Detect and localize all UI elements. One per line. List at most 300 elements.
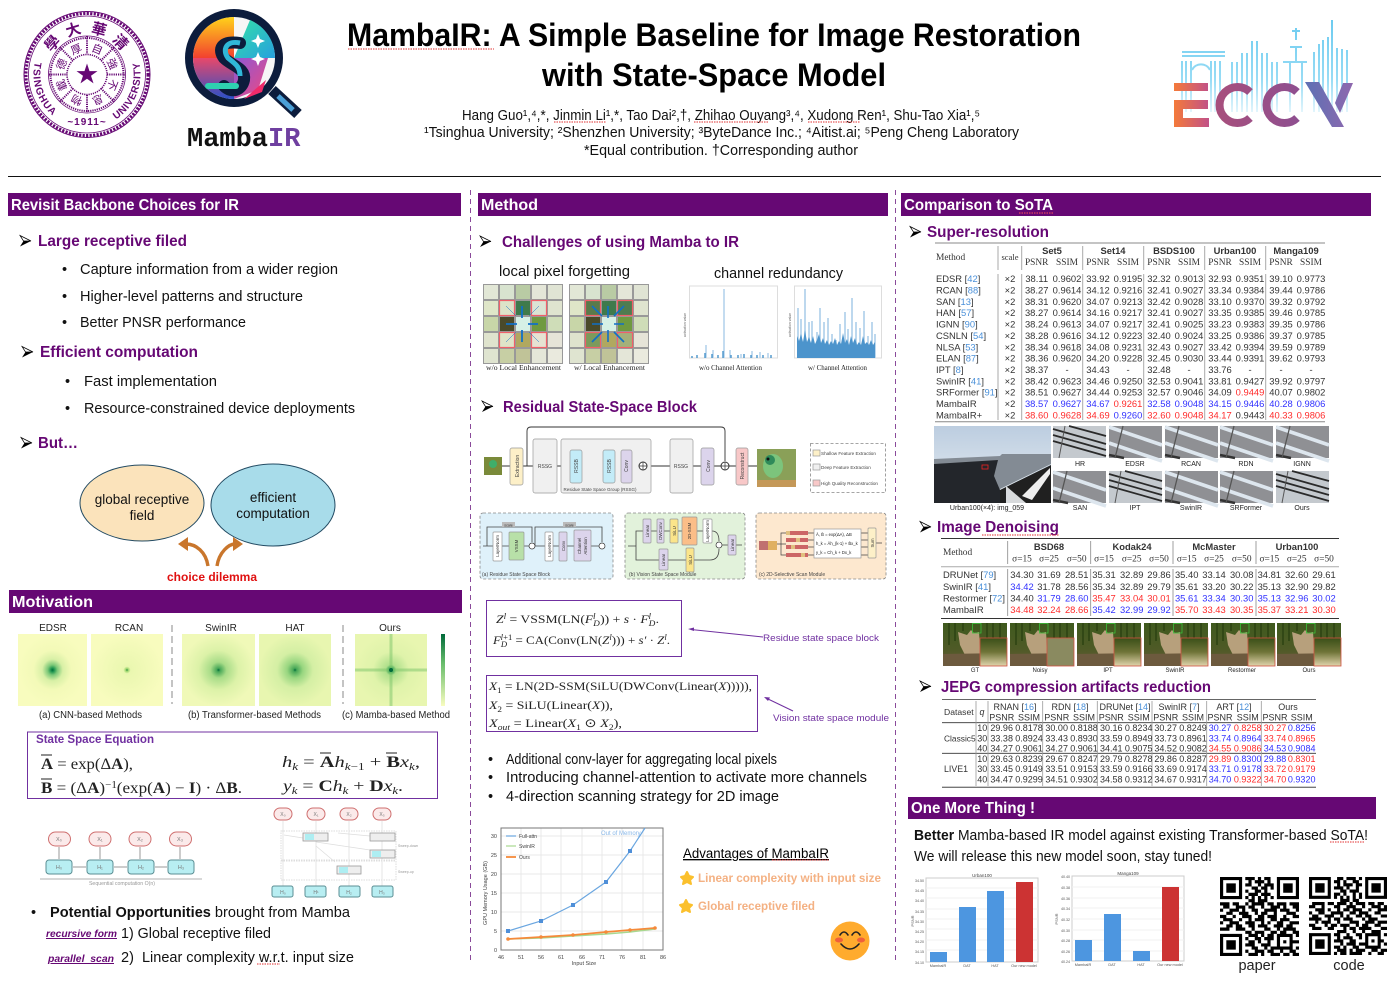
table: super-resolution results: ×2 (1005, 273, 1015, 284)
logo: MambaIR magnifier and snake (185, 9, 298, 114)
text: potential opportunities: Potential Opportunities brought from Mamba (50, 905, 351, 921)
table: JPEG artifact reduction results: LIVE1 (944, 764, 968, 774)
chart: GPU memory usage versus input size (483, 828, 666, 967)
bar chart: Urban100 PSNR: 34.40 (915, 899, 924, 903)
state space equation box: Ah (320, 754, 342, 771)
table: JPEG artifact reduction results: 34.70 (1264, 774, 1286, 784)
bar chart: Urban100 PSNR: DAT (963, 964, 971, 968)
equation box: residue state space block: = CA(Conv(LN( (512, 633, 602, 647)
diagram: choice dilemma ellipses (80, 464, 335, 584)
chart: GPU memory usage versus input size: 25 (491, 853, 497, 859)
table: super-resolution results: 0.9223 (1114, 330, 1142, 341)
bullet list: method contributions: • (488, 770, 493, 786)
table: denoising results: Method (943, 548, 972, 558)
table: super-resolution results: 0.9213 (1114, 296, 1142, 307)
text: potential opportunities (31, 905, 354, 966)
equation box: residue state space block (486, 600, 682, 656)
diagram: parallel scan sweep: H₀ (280, 890, 286, 896)
diagram: MambaIR network architecture: Deep Feature Extraction (821, 465, 871, 470)
diagram: parallel scan sweep: X₂ (346, 812, 352, 818)
table: denoising results: 34.40 (1010, 592, 1034, 604)
table: super-resolution results: 0.9789 (1297, 341, 1325, 352)
table: denoising results: 35.13 (1258, 592, 1281, 604)
table: super-resolution results: 39.46 (1269, 307, 1293, 318)
table: super-resolution results: 0.9394 (1236, 341, 1264, 352)
chart: GPU memory usage versus input size: Full-attn (519, 834, 537, 840)
table: super-resolution results: ×2 (1005, 296, 1015, 307)
table: denoising results: 32.24 (1037, 604, 1061, 615)
logo wordmark: MambaIR: Mamba (187, 125, 268, 155)
table: denoising results: 31.79 (1037, 592, 1061, 604)
table: super-resolution results: 34.15 (1208, 398, 1232, 409)
section heading: Motivation (9, 590, 462, 613)
figure: local pixel forgetting: local pixel forgetting (499, 264, 630, 280)
table: JPEG artifact reduction results: 0.9166 (1125, 764, 1152, 774)
table: super-resolution results: ×2 (1005, 341, 1015, 352)
table: JPEG artifact reduction results: 34.27 (990, 744, 1013, 754)
table: JPEG artifact reduction results: 34.41 (1100, 744, 1123, 754)
section heading: Method: Method (481, 197, 538, 214)
equation box: vision state space module: X (488, 698, 498, 712)
table: denoising results: 33.34 (1202, 592, 1226, 604)
table: JPEG artifact reduction results: SSIM (1182, 712, 1204, 722)
table: super-resolution results: 0.9025 (1175, 319, 1203, 330)
figure: local pixel forgetting (484, 264, 648, 372)
table: denoising results: McMaster (1192, 541, 1236, 552)
table: denoising results: 32.90 (1285, 581, 1308, 592)
table: super-resolution results: 0.9614 (1053, 307, 1081, 318)
table: JPEG artifact reduction results: 30 (977, 764, 987, 774)
chart: GPU memory usage versus input size: 81 (640, 955, 646, 961)
table: super-resolution results: SSIM (1056, 258, 1079, 268)
table: super-resolution results: 0.9806 (1297, 398, 1325, 409)
equation box: vision state space module: 1 (497, 686, 502, 695)
table: super-resolution results: 33.25 (1208, 330, 1232, 341)
arrow and label: residue state space block (688, 628, 879, 644)
heatmap comparison: RCAN (115, 623, 143, 634)
point: large receptive field: • (62, 315, 67, 331)
table: super-resolution results: 32.40 (1147, 330, 1171, 341)
table: super-resolution results: 32.60 (1147, 409, 1171, 420)
panel: vision state space module diagram: Linear (730, 538, 735, 551)
figure: denoising visual comparison (943, 623, 1341, 674)
table: super-resolution results: 0.9614 (1053, 284, 1081, 296)
diagram: choice dilemma ellipses: field (130, 508, 154, 523)
figure: denoising visual comparison: GT (971, 668, 979, 674)
table: super-resolution results: 0.9449 (1236, 387, 1264, 398)
table: JPEG artifact reduction results: 0.8949 (1125, 734, 1152, 744)
equation box: residue state space block: . (667, 633, 670, 647)
table: denoising results: 33.20 (1202, 581, 1226, 592)
equation box: residue state space block: s · F (624, 612, 648, 626)
table: super-resolution results: 38.24 (1025, 319, 1048, 330)
table: JPEG artifact reduction results: 33.38 (990, 734, 1013, 744)
table: super-resolution results: 39.44 (1269, 284, 1293, 296)
panel: Motivation (9, 590, 462, 966)
table: super-resolution results: 32.53 (1147, 375, 1171, 386)
table: denoising results: 33.21 (1285, 604, 1308, 615)
state space equation box: , (415, 754, 420, 771)
table: super-resolution results: 0.9217 (1114, 319, 1142, 330)
table: JPEG artifact reduction results: 0.9178 (1234, 764, 1261, 774)
table: denoising results: 34.81 (1258, 569, 1281, 580)
panel: One More Thing (908, 797, 1387, 974)
table: JPEG artifact reduction results: Dataset (944, 707, 974, 717)
table: super-resolution results: 0.9384 (1236, 284, 1264, 296)
table: JPEG artifact reduction results: SSIM (1128, 712, 1150, 722)
table: super-resolution results: PSNR (1269, 258, 1293, 268)
table: JPEG artifact reduction results: 34.27 (1045, 744, 1068, 754)
diagram: parallel scan sweep: X₃ (379, 812, 385, 818)
table: denoising results: MambaIR (943, 604, 984, 615)
point: large receptive field: • (62, 262, 67, 278)
text: potential opportunities: 2) Linear complexity w.r.t. input size (121, 950, 354, 966)
table: super-resolution results: 0.9613 (1053, 319, 1081, 330)
diagram: MambaIR network architecture: RSSB (607, 459, 613, 473)
table: JPEG artifact reduction results: 30.16 (1100, 723, 1123, 733)
table: denoising results: σ=15 (1094, 554, 1114, 564)
table: super-resolution results: 0.9628 (1053, 409, 1081, 420)
table: super-resolution results: 34.69 (1086, 409, 1110, 420)
diagram: MambaIR network architecture (484, 427, 886, 493)
table: denoising results: 35.70 (1175, 604, 1198, 615)
table: denoising results: 35.42 (1092, 604, 1116, 615)
table: super-resolution results: 0.9027 (1175, 307, 1203, 318)
diagram: parallel scan sweep: Sweep-down (398, 844, 418, 848)
bar chart: Urban100 PSNR: 34.25 (915, 930, 924, 934)
bar chart: Manga109 PSNR: 40.30 (1061, 929, 1070, 933)
table: super-resolution results: 32.41 (1147, 284, 1171, 296)
diagram: parallel scan sweep (272, 808, 418, 897)
table: super-resolution results: 0.9616 (1053, 330, 1081, 341)
table: super-resolution results: ×2 (1005, 319, 1015, 330)
point: efficient computation: Resource-constrained device deployments (84, 401, 355, 417)
table: super-resolution results: 0.9260 (1114, 409, 1142, 420)
diagram: MambaIR network architecture: RSSG (674, 464, 688, 470)
table: denoising results: 30.30 (1230, 592, 1253, 604)
state space equation box: y (280, 778, 292, 795)
table: super-resolution results: 40.28 (1269, 398, 1293, 409)
authors and affiliations (424, 108, 1020, 159)
table: denoising results: Urban100 (1276, 541, 1318, 552)
table: super-resolution results: - (1248, 364, 1252, 375)
bar chart: Urban100 PSNR: 34.15 (915, 950, 924, 954)
bullet list: method contributions (488, 752, 867, 805)
table: JPEG artifact reduction results: 0.8234 (1125, 723, 1152, 733)
state space equation box: State Space Equation (36, 732, 154, 746)
figure: Urban100 visual comparison: IPT (1130, 505, 1141, 512)
diagram: MambaIR network architecture: Reconstruct (740, 452, 746, 479)
authors and affiliations: *Equal contribution. †Corresponding author (584, 143, 858, 159)
panel: vision state space module diagram: (b) Vision State Space Module (629, 572, 697, 578)
table: super-resolution results: PSNR (1086, 258, 1110, 268)
table: JPEG artifact reduction results: 0.9179 (1288, 764, 1315, 774)
table: denoising results: 29.92 (1147, 604, 1171, 615)
table: denoising results: σ=50 (1067, 554, 1087, 564)
table: super-resolution results: - (1309, 364, 1313, 375)
QR code: paper: paper (1238, 958, 1276, 974)
chart: GPU memory usage versus input size: Out of Memory (601, 831, 641, 837)
table: denoising results: 30.02 (1312, 592, 1336, 604)
icon: star (681, 872, 693, 884)
table: JPEG artifact reduction results: 0.8924 (1015, 734, 1043, 744)
table: super-resolution results: scale (1002, 252, 1019, 262)
diagram: MambaIR network architecture: RSSB (574, 459, 580, 473)
figure: Urban100 visual comparison: SRFormer (1230, 505, 1263, 512)
state space equation box: B = (ΔA) (41, 780, 105, 797)
figure: denoising visual comparison: Restormer (1228, 668, 1256, 674)
section heading: Revisit Backbone Choices for IR (8, 193, 461, 216)
bullet list: method contributions: Additional conv-layer for aggregating local pixels (506, 752, 777, 768)
figure: Urban100 visual comparison: HR (1075, 461, 1085, 468)
table: super-resolution results: 0.9383 (1236, 319, 1264, 330)
table: denoising results: Restormer [72] (943, 592, 1005, 604)
equation box: residue state space block: Z (496, 612, 504, 626)
heatmap comparison: (b) Transformer-based Methods (188, 710, 321, 721)
figure: Urban100 visual comparison: Urban100(×4): img_059 (950, 505, 1024, 512)
logo: Tsinghua University seal: 德 (53, 56, 70, 72)
bar chart: Urban100 PSNR: HAT (991, 964, 999, 968)
table: super-resolution results: ×2 (1005, 409, 1015, 420)
table: super-resolution results: 0.9250 (1114, 375, 1142, 386)
figure: local pixel forgetting: w/ Local Enhancement (574, 364, 645, 372)
table: super-resolution results: 0.9253 (1114, 387, 1142, 398)
diagram: sequential computation: H₂ (138, 865, 144, 871)
table: denoising results: 32.96 (1285, 592, 1308, 604)
table: super-resolution results: 34.07 (1086, 296, 1110, 307)
table: super-resolution results: 0.9195 (1114, 273, 1142, 284)
text: potential opportunities: 1) Global receptive filed (121, 926, 271, 942)
panel: residual state space block diagram: Channel (577, 538, 582, 554)
logo: Tsinghua University seal: TSINGHUA (33, 63, 56, 116)
logo: Tsinghua University seal (24, 11, 150, 138)
table: super-resolution results: 0.9806 (1297, 409, 1325, 420)
panel: residual state space block diagram: Conv (561, 540, 566, 551)
table: super-resolution results: - (1065, 364, 1069, 375)
table: JPEG artifact reduction results: 40 (977, 744, 987, 754)
panel: vision state space module diagram: Linear (645, 524, 650, 537)
heatmap comparison (18, 623, 450, 721)
callout: advantages of MambaIR (680, 846, 881, 960)
QR code: code: code (1333, 958, 1365, 974)
state space equation box: . (398, 778, 403, 795)
table: super-resolution results: 38.60 (1025, 409, 1048, 420)
table: super-resolution results: 38.31 (1025, 296, 1048, 307)
table: denoising results: σ=25 (1287, 554, 1307, 564)
bar chart: Manga109 PSNR: Manga109 (1117, 871, 1139, 876)
figure: denoising visual comparison: SwinIR (1165, 668, 1185, 674)
table: super-resolution results: 0.9027 (1175, 341, 1203, 352)
panel: residual state space block diagram (480, 513, 613, 579)
text: teaser: Better Mamba-based IR model against existing Transformer-based SoTA! (914, 828, 1368, 844)
table: denoising results: 30.22 (1230, 581, 1253, 592)
table: super-resolution results: ×2 (1005, 398, 1015, 409)
table: super-resolution results: SSIM (1117, 258, 1140, 268)
table: JPEG artifact reduction results: 0.9084 (1288, 744, 1315, 754)
bar chart: Urban100 PSNR: 34.30 (915, 920, 924, 924)
table: JPEG artifact reduction results: PSNR (989, 712, 1015, 722)
diagram: sequential computation (40, 832, 202, 887)
equation box: residue state space block: F (584, 612, 594, 626)
table: denoising results: 30.30 (1312, 604, 1336, 615)
table: denoising results: DRUNet [79] (943, 569, 996, 580)
diagram: MambaIR network architecture: RSSG (538, 464, 552, 470)
state space equation box: + (365, 754, 386, 771)
table: super-resolution results: 0.9027 (1175, 284, 1203, 296)
table: super-resolution results: 34.17 (1208, 409, 1232, 420)
table: super-resolution results: 0.9618 (1053, 341, 1081, 352)
section heading: Revisit Backbone Choices for IR: Revisit Backbone Choices for IR (11, 197, 239, 214)
table: super-resolution results: 0.9013 (1175, 273, 1203, 284)
table: JPEG artifact reduction results: 0.9299 (1015, 774, 1043, 784)
table: super-resolution results: 0.9602 (1053, 273, 1081, 284)
callout: advantages of MambaIR: Global receptive filed (698, 899, 815, 913)
section heading: Comparison to SoTA: Comparison to SoTA (904, 197, 1053, 214)
table: super-resolution results: 33.10 (1208, 296, 1232, 307)
section heading: Comparison to SoTA (901, 193, 1371, 216)
diagram: choice dilemma ellipses: efficient (250, 490, 296, 505)
state space equation box: k (392, 786, 399, 797)
point: efficient computation (22, 344, 355, 417)
table: JPEG artifact reduction results: SwinIR [7] (1158, 702, 1200, 712)
table: JPEG artifact reduction results: 29.88 (1264, 754, 1286, 764)
table: super-resolution results: 0.9793 (1297, 353, 1325, 364)
point: but: But… (38, 435, 78, 452)
diagram: parallel scan sweep: Sweep-up (398, 870, 414, 874)
table: super-resolution results: 0.9028 (1175, 296, 1203, 307)
table: super-resolution results: IGNN [90] (936, 319, 978, 330)
bar chart: Urban100 PSNR (910, 873, 1038, 968)
figure: Urban100 visual comparison: EDSR (1125, 461, 1145, 468)
table: super-resolution results: - (1187, 364, 1191, 375)
table: super-resolution results: 0.9391 (1236, 353, 1264, 364)
table: super-resolution results: 0.9386 (1236, 330, 1264, 341)
chart: GPU memory usage versus input size: 0 (494, 948, 497, 954)
chart: GPU memory usage versus input size: 15 (491, 891, 497, 897)
table: super-resolution results: 0.9797 (1297, 375, 1325, 386)
panel: vision state space module diagram: Linear (661, 553, 666, 566)
logo: Tsinghua University seal: 不 (104, 77, 119, 92)
table: denoising results: 33.14 (1202, 569, 1226, 580)
chart: GPU memory usage versus input size: Ours (519, 855, 530, 861)
diagram: sequential computation: H₁ (97, 865, 103, 871)
diagram: MambaIR network architecture: Conv (706, 460, 712, 472)
table: JPEG artifact reduction results: 33.59 (1100, 764, 1123, 774)
table: JPEG artifact reduction results: 29.96 (990, 723, 1013, 733)
text: potential opportunities: • (31, 905, 36, 921)
QR code: code (1309, 877, 1387, 974)
table: JPEG artifact reduction results: 0.8278 (1125, 754, 1152, 764)
bar chart: Manga109 PSNR: 40.34 (1061, 907, 1070, 911)
table: super-resolution results: PSNR (1147, 258, 1171, 268)
table: JPEG artifact reduction results: 0.8964 (1234, 734, 1261, 744)
table: denoising results: SwinIR [41] (943, 581, 991, 592)
table: super-resolution results: 39.35 (1269, 319, 1293, 330)
equation box: residue state space block: ))) + (612, 633, 639, 647)
panel: vision state space module diagram (625, 513, 745, 579)
figure: Urban100 visual comparison (934, 426, 1329, 512)
panel: 2D selective scan module diagram (756, 513, 886, 579)
state space equation box (28, 732, 438, 798)
table: JPEG artifact reduction results: 34.67 (1154, 774, 1177, 784)
table: JPEG artifact reduction results: SSIM (1018, 712, 1040, 722)
table: super-resolution results: 40.33 (1269, 409, 1293, 420)
table: super-resolution results: 34.08 (1086, 341, 1110, 352)
equation box: vision state space module (486, 676, 758, 732)
table: super-resolution results: EDSR [42] (936, 273, 980, 284)
table: super-resolution results: 32.41 (1147, 307, 1171, 318)
table: denoising results (941, 538, 1339, 618)
table: super-resolution results: - (1126, 364, 1130, 375)
table: super-resolution results: SAN [13] (936, 296, 974, 307)
table: JPEG artifact reduction results: 34.47 (990, 774, 1013, 784)
table: JPEG artifact reduction results: SSIM (1237, 712, 1259, 722)
table: super-resolution results: SSIM (1178, 258, 1201, 268)
table: super-resolution results: 34.07 (1086, 319, 1110, 330)
table: super-resolution results: HAN [57] (936, 307, 974, 318)
table: denoising results: 30.01 (1147, 592, 1171, 604)
table: JPEG artifact reduction results: DRUNet [14] (1099, 702, 1151, 712)
table: denoising results: σ=50 (1314, 554, 1334, 564)
state space equation box: k (292, 786, 298, 797)
equation box: vision state space module: = LN(2D-SSM(SiLU(DWConv(Linear( (502, 679, 718, 693)
logo: Tsinghua University seal: 學 (41, 32, 64, 55)
table: super-resolution results: 0.9041 (1175, 375, 1203, 386)
diagram: sequential computation: X₁ (97, 837, 103, 843)
table: JPEG artifact reduction results: 29.89 (1209, 754, 1231, 764)
diagram: MambaIR network architecture: Conv (624, 460, 630, 472)
table: super-resolution results: 34.46 (1086, 375, 1110, 386)
state space equation box: k−1 (345, 762, 361, 773)
table: JPEG artifact reduction results: 29.63 (990, 754, 1013, 764)
equation box: vision state space module: 2 (497, 705, 502, 714)
table: denoising results: 35.34 (1092, 581, 1116, 592)
equation box: vision state space module: ), (614, 716, 622, 730)
table: denoising results: 28.66 (1065, 604, 1088, 615)
panel: vision state space module diagram: LayerNorm (705, 520, 710, 542)
table: denoising results: 33.43 (1202, 604, 1226, 615)
panel: 2D selective scan module diagram: y_k = Ch_k + Dx_k (816, 550, 852, 555)
figure: denoising visual comparison: Noisy (1032, 668, 1048, 674)
chart: GPU memory usage versus input size: 56 (538, 955, 544, 961)
table: denoising results: 30.08 (1230, 569, 1253, 580)
bar chart: Manga109 PSNR (1054, 871, 1184, 967)
title: MambaIR: A Simple Baseline for Image Restoration (347, 17, 1081, 53)
logo: Tsinghua University seal: 息 (90, 91, 106, 108)
state space equation box: Dx (369, 778, 390, 795)
chart: with channel attention (788, 286, 882, 372)
table: super-resolution results: 0.9623 (1053, 375, 1081, 386)
equation box: residue state space block: l (504, 612, 507, 621)
figure: denoising visual comparison: IPT (1103, 668, 1113, 674)
diagram: sequential computation: H₀ (56, 865, 62, 871)
table: JPEG artifact reduction results: 29.86 (1154, 754, 1177, 764)
table: denoising results: 32.89 (1120, 581, 1143, 592)
chart: GPU memory usage versus input size: 46 (498, 955, 504, 961)
equation box: residue state space block: D (500, 640, 507, 649)
title (347, 17, 1081, 93)
panel: residual state space block diagram: LayerNorm (495, 535, 500, 557)
table: super-resolution results: 39.10 (1269, 273, 1293, 284)
bullet list: method contributions: 4-direction scanning strategy for 2D image (506, 789, 779, 805)
figure: Urban100 visual comparison: RCAN (1181, 461, 1201, 468)
table: denoising results: 34.42 (1010, 581, 1034, 592)
table: super-resolution results: 39.59 (1269, 341, 1293, 352)
table: denoising results: BSD68 (1034, 541, 1064, 552)
equation box: vision state space module: X (488, 716, 499, 730)
table: JPEG artifact reduction results: 0.8300 (1234, 754, 1261, 764)
diagram: sequential computation: X₃ (177, 837, 183, 843)
